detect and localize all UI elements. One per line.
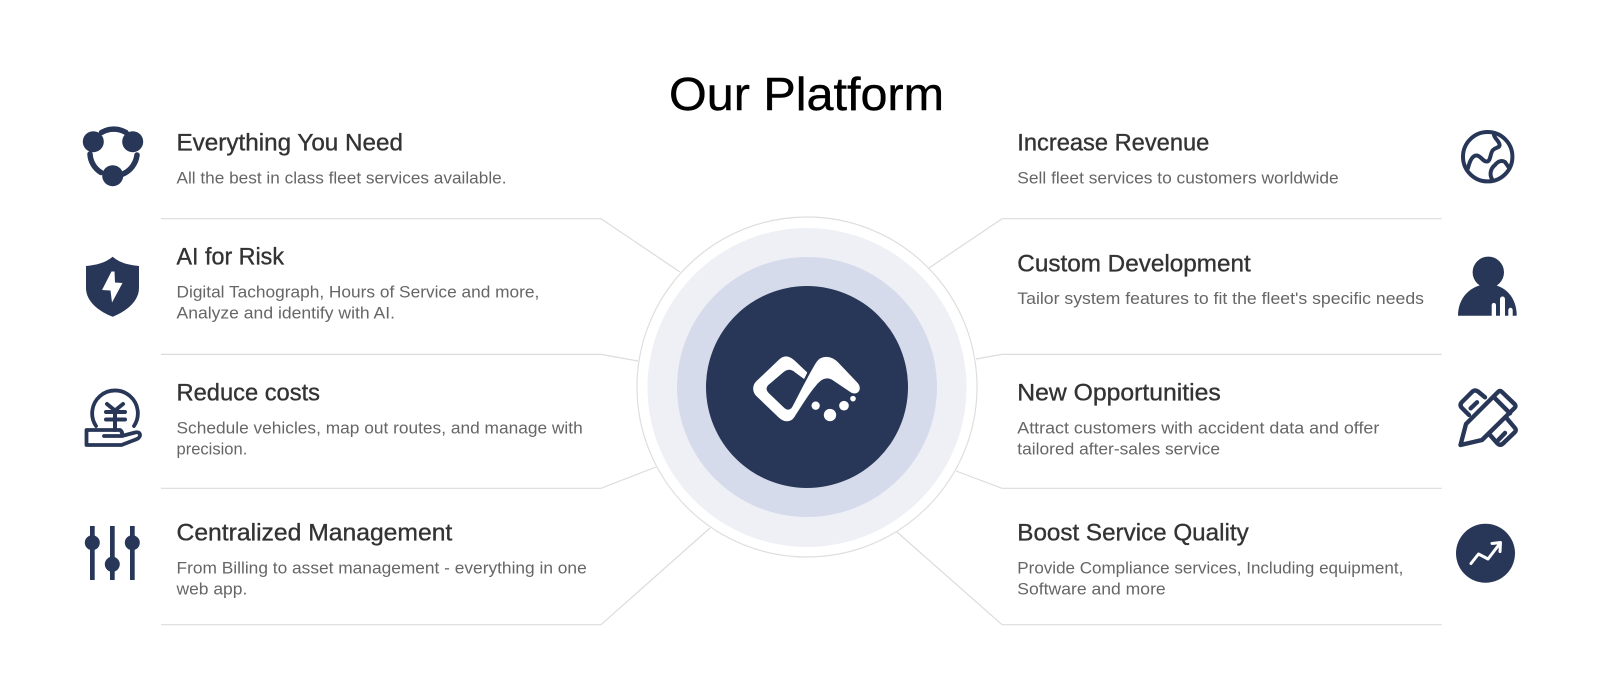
light ring (648, 228, 966, 547)
description: Schedule vehicles, map out routes, and manage with (176, 418, 583, 437)
icon: globe (1463, 132, 1512, 181)
heading: Everything You Need (176, 130, 403, 157)
outer ring (637, 217, 977, 557)
title: Our Platform (669, 68, 944, 120)
icon: sliders (85, 526, 140, 580)
panel: everything you need (83, 129, 507, 187)
heading: Reduce costs (176, 380, 320, 407)
panel: ai for risk: Analyze and identify with AI. (176, 303, 395, 322)
panel: boost service quality: Software and more (1017, 579, 1166, 598)
panel: boost service quality (1017, 519, 1515, 598)
icon: growth arrow (1456, 524, 1515, 583)
description: All the best in class fleet services available. (176, 168, 506, 187)
connector lines (161, 219, 1442, 625)
description: Digital Tachograph, Hours of Service and more, (176, 282, 539, 301)
heading: Custom Development (1017, 251, 1251, 278)
description: Provide Compliance services, Including equipment, (1017, 558, 1403, 577)
heading: Centralized Management (176, 519, 453, 546)
icon: shield (86, 257, 139, 317)
panel: reduce costs (86, 380, 583, 458)
panel: ai for risk (86, 243, 539, 322)
middle ring (677, 257, 937, 517)
description: Sell fleet services to customers worldwide (1017, 168, 1339, 187)
icon: pencil and ruler (1460, 390, 1516, 445)
heading: Increase Revenue (1017, 130, 1209, 157)
heading: Boost Service Quality (1017, 519, 1249, 546)
dark core (706, 286, 908, 488)
panel: new opportunities (1017, 380, 1516, 458)
panel: custom development (1017, 251, 1517, 316)
description: Tailor system features to fit the fleet's specific needs (1017, 289, 1424, 308)
icon: hand with coin (86, 390, 140, 445)
heading: New Opportunities (1017, 380, 1221, 407)
icon: logo (754, 357, 859, 421)
icon: person with bars (1458, 257, 1517, 316)
panel: new opportunities: tailored after-sales service (1017, 439, 1220, 458)
panel: centralized management: web app. (175, 579, 247, 598)
panel: centralized management (85, 519, 587, 598)
central hub (637, 217, 977, 557)
description: From Billing to asset management - everything in one (176, 558, 587, 577)
panel: increase revenue (1017, 130, 1512, 187)
panel: reduce costs: precision. (176, 439, 247, 458)
icon: network (83, 129, 143, 186)
description: Attract customers with accident data and offer (1017, 418, 1380, 437)
heading: AI for Risk (176, 243, 285, 270)
